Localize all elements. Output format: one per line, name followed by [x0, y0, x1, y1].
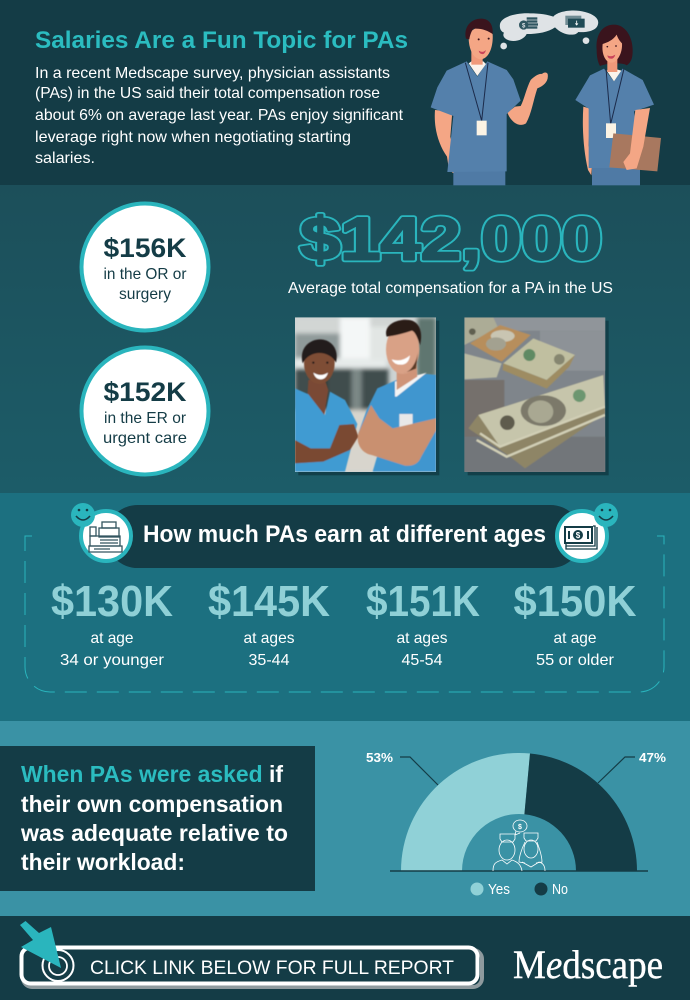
photo: two smiling PAs — [295, 317, 439, 475]
callout: ER or urgent care: $152K — [104, 377, 187, 407]
dashed frame — [25, 536, 664, 692]
title: Salaries Are a Fun Topic for PAs — [35, 27, 408, 54]
legend — [470, 881, 568, 898]
arrow — [20, 921, 61, 968]
stat: 34 or younger: at age — [90, 630, 134, 647]
caption: Average total compensation for a PA in the US — [288, 280, 613, 297]
call-to-action button: CLICK LINK BELOW FOR FULL REPORT — [90, 958, 454, 979]
question box: When PAs were asked if — [21, 761, 283, 787]
semi-donut chart: 47% — [639, 750, 666, 765]
icon: smiley — [594, 503, 618, 527]
stat: 34 or younger: 34 or younger — [60, 652, 165, 669]
stat: 35-44: $145K — [208, 577, 330, 626]
stat: 34 or younger: $130K — [51, 577, 173, 626]
man — [431, 19, 548, 185]
intro text: (PAs) in the US said their total compensation rose — [35, 85, 380, 102]
big number: $142,000 — [300, 206, 602, 272]
big number: $142,000 — [300, 206, 602, 272]
call-to-action button — [22, 948, 482, 987]
panel: adequacy of compensation — [0, 746, 666, 898]
coin icon — [519, 17, 538, 30]
stat: 35-44: 35-44 — [248, 652, 290, 669]
icon: two nurses with dollar speech bubble — [493, 820, 545, 871]
man in photo — [358, 374, 436, 472]
stat: 55 or older: $150K — [514, 577, 637, 626]
coin icon: $ — [522, 23, 526, 29]
semi-donut chart — [366, 750, 666, 871]
heading banner: How much PAs earn at different ages — [143, 521, 546, 548]
icon: cash register — [71, 503, 131, 561]
stat: 45-54 — [366, 577, 480, 669]
stat: 55 or older — [514, 577, 637, 669]
callout: OR or surgery — [82, 204, 208, 330]
semi-donut chart: 53% — [366, 750, 393, 765]
stat: 55 or older: 55 or older — [536, 652, 615, 669]
intro text: about 6% on average last year. PAs enjoy significant — [35, 107, 404, 124]
stat: 45-54: 45-54 — [402, 652, 443, 669]
question box: was adequate relative to — [20, 820, 288, 846]
question box: their own compensation — [21, 791, 283, 817]
callout: OR or surgery: surgery — [119, 286, 171, 303]
panel: header — [35, 11, 661, 185]
intro text: In a recent Medscape survey, physician assistants — [35, 65, 390, 82]
woman in photo — [295, 388, 357, 472]
logo: Medscape: Medscape — [513, 942, 663, 987]
icon: smiley — [71, 503, 95, 527]
intro text: leverage right now when negotiating starting — [35, 129, 351, 146]
stat: 35-44: at ages — [244, 630, 294, 647]
panel: salary by setting and average compensation — [82, 204, 613, 475]
question box: their workload: — [21, 849, 185, 875]
icon: two nurses with dollar speech bubble: $ — [518, 824, 522, 831]
callout: OR or surgery: $156K — [104, 233, 187, 263]
photo: stacks of dollar bills — [464, 317, 609, 475]
legend: Yes — [488, 881, 510, 898]
panel: footer — [20, 921, 663, 987]
callout: ER or urgent care: in the ER or — [104, 410, 187, 427]
heading banner — [106, 505, 582, 568]
question box — [0, 746, 315, 891]
callout: OR or surgery: in the OR or — [104, 266, 187, 283]
stat: 45-54: $151K — [366, 577, 480, 626]
callout: ER or urgent care: urgent care — [103, 430, 187, 447]
stat: 34 or younger — [51, 577, 173, 669]
panel: earnings by age — [25, 503, 664, 692]
icon: banknotes: $ — [576, 531, 581, 540]
legend: No — [552, 881, 568, 898]
intro text — [35, 65, 404, 167]
woman — [575, 25, 661, 185]
callout: ER or urgent care — [82, 348, 208, 474]
intro text: salaries. — [35, 150, 95, 167]
stat: 35-44 — [208, 577, 330, 669]
icon: banknotes — [557, 503, 618, 561]
illustration: two PAs with thought bubbles — [431, 11, 661, 185]
thought bubbles — [500, 11, 598, 49]
stat: 45-54: at ages — [396, 630, 448, 647]
cash icon — [565, 16, 585, 28]
stat: 55 or older: at age — [554, 630, 597, 647]
